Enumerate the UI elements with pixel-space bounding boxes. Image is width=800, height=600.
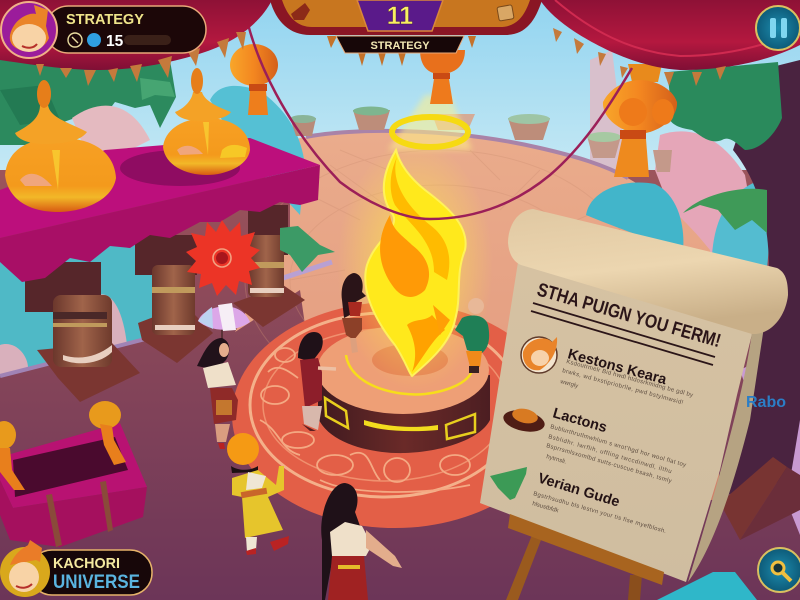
scroll top roll xyxy=(508,209,788,334)
right blue bushes xyxy=(586,178,770,285)
icon: plate of kachori xyxy=(501,406,547,435)
terrace rim xyxy=(306,131,628,178)
easel xyxy=(506,514,664,600)
avatar xyxy=(1,2,57,58)
pillar three xyxy=(233,205,305,327)
magenta crate xyxy=(0,401,147,547)
green leaf next to pillar xyxy=(280,226,335,272)
search button xyxy=(758,548,800,592)
strategy label plate: STRATEGY xyxy=(370,40,430,52)
section text: hytrnsli. xyxy=(545,454,567,466)
top player panel xyxy=(1,2,206,58)
central stone platform xyxy=(317,326,490,453)
icon: clock xyxy=(68,33,82,47)
scroll with strategy guide xyxy=(480,209,788,582)
pillar one xyxy=(25,262,140,402)
tree leaves xyxy=(668,62,782,233)
section text: Bgstrhsudhu bls lestvn your tis fise myefblosh. xyxy=(532,491,667,535)
top centre score panel xyxy=(270,0,542,35)
terrace tile pattern xyxy=(245,150,635,410)
gold post right xyxy=(89,401,126,465)
character: woman in foreground xyxy=(321,483,402,600)
table top xyxy=(0,138,320,238)
pillar two xyxy=(135,235,213,363)
section text: Bsblidhr. lwrflih, uffling twccdinwdl, ilthu xyxy=(547,434,672,475)
character: old man in green xyxy=(455,298,489,373)
scroll curled edge xyxy=(688,320,765,582)
halo ring xyxy=(392,117,468,147)
rope across the scene xyxy=(243,0,652,219)
progress bar xyxy=(124,35,171,45)
section title: Kestons Keara: Kestons Keara xyxy=(566,346,669,388)
character: boy with orange hat xyxy=(227,433,289,555)
icon: left resource xyxy=(291,3,310,20)
icon: blue gem xyxy=(87,33,101,47)
teal shape bottom right xyxy=(657,572,757,600)
character: woman on the platform xyxy=(342,273,366,353)
hanging lantern left xyxy=(230,44,278,115)
icon: character portrait xyxy=(521,337,557,373)
table front cloth xyxy=(0,165,320,282)
flame glow xyxy=(337,140,493,390)
left bush xyxy=(0,55,176,145)
icon: green leaf wrap xyxy=(490,467,527,500)
rug xyxy=(232,302,558,528)
section title: Lactons: Lactons xyxy=(551,405,609,436)
hanging lantern right xyxy=(603,30,677,177)
pink arch behind table xyxy=(72,106,150,160)
section text: Bublurthrutlmwhlum s wrot'hgd hor wool flat toy xyxy=(549,424,687,469)
platform flame ring xyxy=(346,344,472,394)
scroll heading: STHA PUIGN YOU FERM! xyxy=(535,280,723,352)
light beam from lantern xyxy=(388,95,472,150)
section text: brwks, wd bxstipriobrlle, pwd bstylmwsid! xyxy=(561,368,684,406)
magenta table canopy xyxy=(0,138,320,282)
tassels under score panel xyxy=(327,36,476,66)
golden dome right xyxy=(163,68,250,175)
planters xyxy=(290,106,672,172)
top curtain left xyxy=(0,0,272,86)
character: woman at platform edge xyxy=(298,332,336,431)
umbrella xyxy=(198,303,250,344)
player name: STRATEGY xyxy=(66,12,144,28)
scroll paper xyxy=(480,262,753,582)
score number: 11 xyxy=(387,2,413,30)
section text: hlsustbfdk xyxy=(531,501,560,515)
partial label: Rabo: Rabo xyxy=(746,394,786,411)
character: woman with umbrella xyxy=(197,338,238,449)
section title: Verian Gude: Verian Gude xyxy=(536,471,621,511)
table pillars xyxy=(25,205,305,402)
pause button xyxy=(756,6,800,50)
top curtain right xyxy=(540,0,800,86)
strategy label plate xyxy=(336,36,464,53)
logo mascot xyxy=(0,540,50,597)
gold post left xyxy=(0,421,25,490)
golden dome left xyxy=(5,80,116,212)
section text: Ksdoutrmelr Bid hwdl htdosrkmidng be gdl by xyxy=(565,359,694,399)
tree trunk and base xyxy=(720,60,800,540)
game logo: UNIVERSE xyxy=(53,572,140,593)
heading underline xyxy=(531,303,715,365)
icon: right resource xyxy=(497,5,514,21)
score: 15 xyxy=(106,33,124,50)
red mandala flower xyxy=(186,220,260,296)
terrace floor xyxy=(235,131,720,500)
centre lantern xyxy=(420,50,465,104)
game logo: KACHORI xyxy=(53,555,120,572)
flame xyxy=(365,150,466,376)
blue bush behind table xyxy=(210,86,305,215)
table shadow under dome xyxy=(120,150,240,186)
score plate xyxy=(357,0,443,31)
player bar xyxy=(45,6,206,53)
teal wall under table xyxy=(0,230,332,376)
game logo xyxy=(0,540,152,597)
section text: Bsprrsmlsxomlbd sutts-cuscue bsash, tsmly xyxy=(545,443,672,485)
section text: wwrgly xyxy=(559,379,579,390)
